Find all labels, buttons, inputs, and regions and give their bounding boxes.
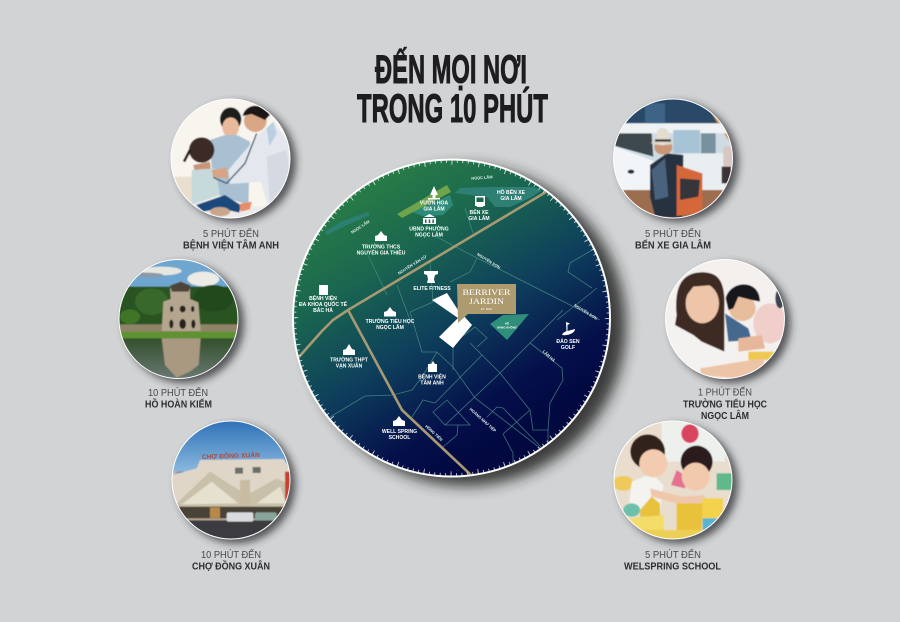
- label: Hồ Hoàn Kiếm: HỒ HOÀN KIẾM: [145, 398, 212, 410]
- label: Trường tiểu học Ngọc Lâm: 1 PHÚT ĐẾN: [698, 386, 752, 398]
- label: Trường Tiểu học Ngọc Lâm: TRƯỜNG TIỂU HỌC: [366, 317, 415, 325]
- project site: white plot: [432, 293, 472, 348]
- label: Bệnh viện Tâm Anh: TÂM ANH: [420, 379, 444, 386]
- label: Trường Tiểu học Ngọc Lâm: NGỌC LÂM: [376, 324, 404, 331]
- road names: NGUYỄN VĂN CỪ: [397, 253, 428, 276]
- main tan roads: [298, 192, 546, 476]
- label: Hồ Hoàn Kiếm: 10 PHÚT ĐẾN: [148, 386, 208, 399]
- label: Vườn hoa Gia Lâm: VƯỜN HOA: [420, 198, 449, 206]
- label: Bệnh viện Tâm Anh: [183, 227, 279, 252]
- icon: Well Spring: [393, 416, 405, 426]
- road names: NGUYỄN SƠN: [476, 252, 501, 270]
- label: Chợ Đồng Xuân: CHỢ ĐỒNG XUÂN: [192, 560, 270, 572]
- road names: HỒNG TIẾN: [424, 424, 444, 442]
- label: Chợ Đồng Xuân: [192, 548, 270, 572]
- label: Trường tiểu học Ngọc Lâm: NGỌC LÂM: [701, 409, 749, 422]
- scale ticks: [295, 162, 608, 474]
- road names: HOÀNG NHƯ TIẾP: [469, 407, 498, 433]
- label: Chợ Đồng Xuân: 10 PHÚT ĐẾN: [201, 548, 261, 561]
- road names: NGỌC LÂM: [350, 219, 370, 235]
- label: Elite Fitness: ELITE FITNESS: [413, 286, 451, 292]
- label: Bến xe Gia Lâm: 5 PHÚT ĐẾN: [645, 227, 701, 240]
- photo: Hồ Hoàn Kiếm: [117, 257, 244, 383]
- circular map: [292, 158, 611, 478]
- label: Đảo Sen Golf: GOLF: [561, 345, 575, 351]
- infographic canvas: [118, 46, 796, 571]
- label: Trường THCS Nguyễn Gia Thiều: TRƯỜNG THCS: [362, 242, 401, 250]
- label: Trường THCS Nguyễn Gia Thiều: NGUYỄN GIA THIỀU: [357, 249, 406, 256]
- label: Bến xe Gia Lâm: BẾN XE GIA LÂM: [635, 238, 711, 252]
- label: Bệnh viện Tâm Anh: BỆNH VIỆN TÂM ANH: [183, 238, 279, 252]
- label: Trường tiểu học Ngọc Lâm: [683, 386, 767, 422]
- project logo: Berriver Jardin: DY RAO: [481, 307, 493, 311]
- label: Trường THPT Vạn Xuân: VẠN XUÂN: [336, 362, 363, 369]
- label: Bệnh viện Đa khoa Quốc tế Bắc Hà: ĐA KHOA QUỐC TẾ: [299, 301, 348, 308]
- label: Bệnh viện Đa khoa Quốc tế Bắc Hà: BỆNH VIỆN: [309, 294, 337, 302]
- project logo: Berriver Jardin: JARDIN: [469, 297, 504, 306]
- project logo: Berriver Jardin: BERRIVER: [462, 288, 511, 297]
- icon: trường tiểu học: [384, 307, 396, 316]
- project logo: Berriver Jardin: [457, 284, 516, 323]
- label: Welspring School: [624, 548, 722, 572]
- icon: trường THPT: [343, 344, 355, 355]
- icon: Elite Fitness: [424, 271, 438, 283]
- title: TRONG 10 PHÚT: [357, 85, 548, 131]
- road names: [350, 174, 598, 442]
- label: Hồ Bến xe Gia Lâm: HỒ BẾN XE: [497, 189, 526, 196]
- title: ĐẾN MỌI NƠI: [375, 46, 527, 92]
- title: [357, 46, 548, 131]
- photo: Bến xe Gia Lâm: [612, 97, 738, 222]
- icon: bệnh viện Tâm Anh: [428, 361, 437, 372]
- label: UBND phường Ngọc Lâm: NGỌC LÂM: [415, 232, 443, 238]
- label: Hồ Hàng Không: HÀNG KHÔNG: [497, 324, 518, 330]
- label: Bến xe Gia Lâm: BẾN XE: [470, 209, 489, 216]
- icon: bến xe: [475, 196, 485, 207]
- label: Trường tiểu học Ngọc Lâm: TRƯỜNG TIỂU HỌC: [683, 398, 767, 410]
- photo: Welspring School: [612, 418, 738, 544]
- label: Trường THPT Vạn Xuân: TRƯỜNG THPT: [330, 356, 369, 364]
- label: Welspring School: WELSPRING SCHOOL: [624, 560, 722, 572]
- label: Hồ Hàng Không: HỒ: [505, 320, 510, 326]
- label: Bệnh viện Đa khoa Quốc tế Bắc Hà: BẮC HÀ: [313, 306, 333, 314]
- label: Well Spring School: WELL SPRING: [382, 429, 417, 435]
- icon: Vườn hoa Gia Lâm: [428, 186, 440, 200]
- icon: UBND phường: [423, 214, 436, 224]
- photo: Chợ Đồng Xuân: [170, 418, 296, 544]
- photo: Trường tiểu học Ngọc Lâm: [662, 255, 790, 383]
- road names: LÂM HÀ: [542, 349, 556, 363]
- water and park areas: [325, 185, 542, 340]
- label: Hồ Hoàn Kiếm: [145, 386, 212, 410]
- label: Bến xe Gia Lâm: [635, 227, 711, 252]
- thin road network: [330, 208, 600, 473]
- road names: NGỌC LÂM: [471, 174, 493, 181]
- photo: Bệnh viện Tâm Anh: [167, 97, 296, 223]
- icon: golf flag: [562, 322, 575, 335]
- label: Hồ Bến xe Gia Lâm: GIA LÂM: [500, 195, 522, 202]
- label: Vườn hoa Gia Lâm: GIA LÂM: [423, 206, 445, 212]
- icon: bệnh viện đa khoa: [319, 285, 328, 295]
- map shadow: [306, 166, 626, 486]
- label: Bến xe Gia Lâm: GIA LÂM: [468, 215, 490, 222]
- road names: NGUYỄN SƠN: [573, 303, 598, 321]
- label: Welspring School: 5 PHÚT ĐẾN: [645, 548, 701, 561]
- label: Bệnh viện Tâm Anh: 5 PHÚT ĐẾN: [203, 227, 259, 240]
- label: UBND phường Ngọc Lâm: UBND PHƯỜNG: [409, 224, 449, 232]
- label: Bệnh viện Tâm Anh: BỆNH VIỆN: [418, 372, 446, 380]
- label: Well Spring School: SCHOOL: [389, 435, 410, 441]
- icon: trường THCS: [375, 231, 387, 241]
- sign text: CHỢ ĐỒNG XUÂN: [202, 449, 260, 461]
- label: Đảo Sen Golf: ĐẢO SEN: [556, 338, 580, 345]
